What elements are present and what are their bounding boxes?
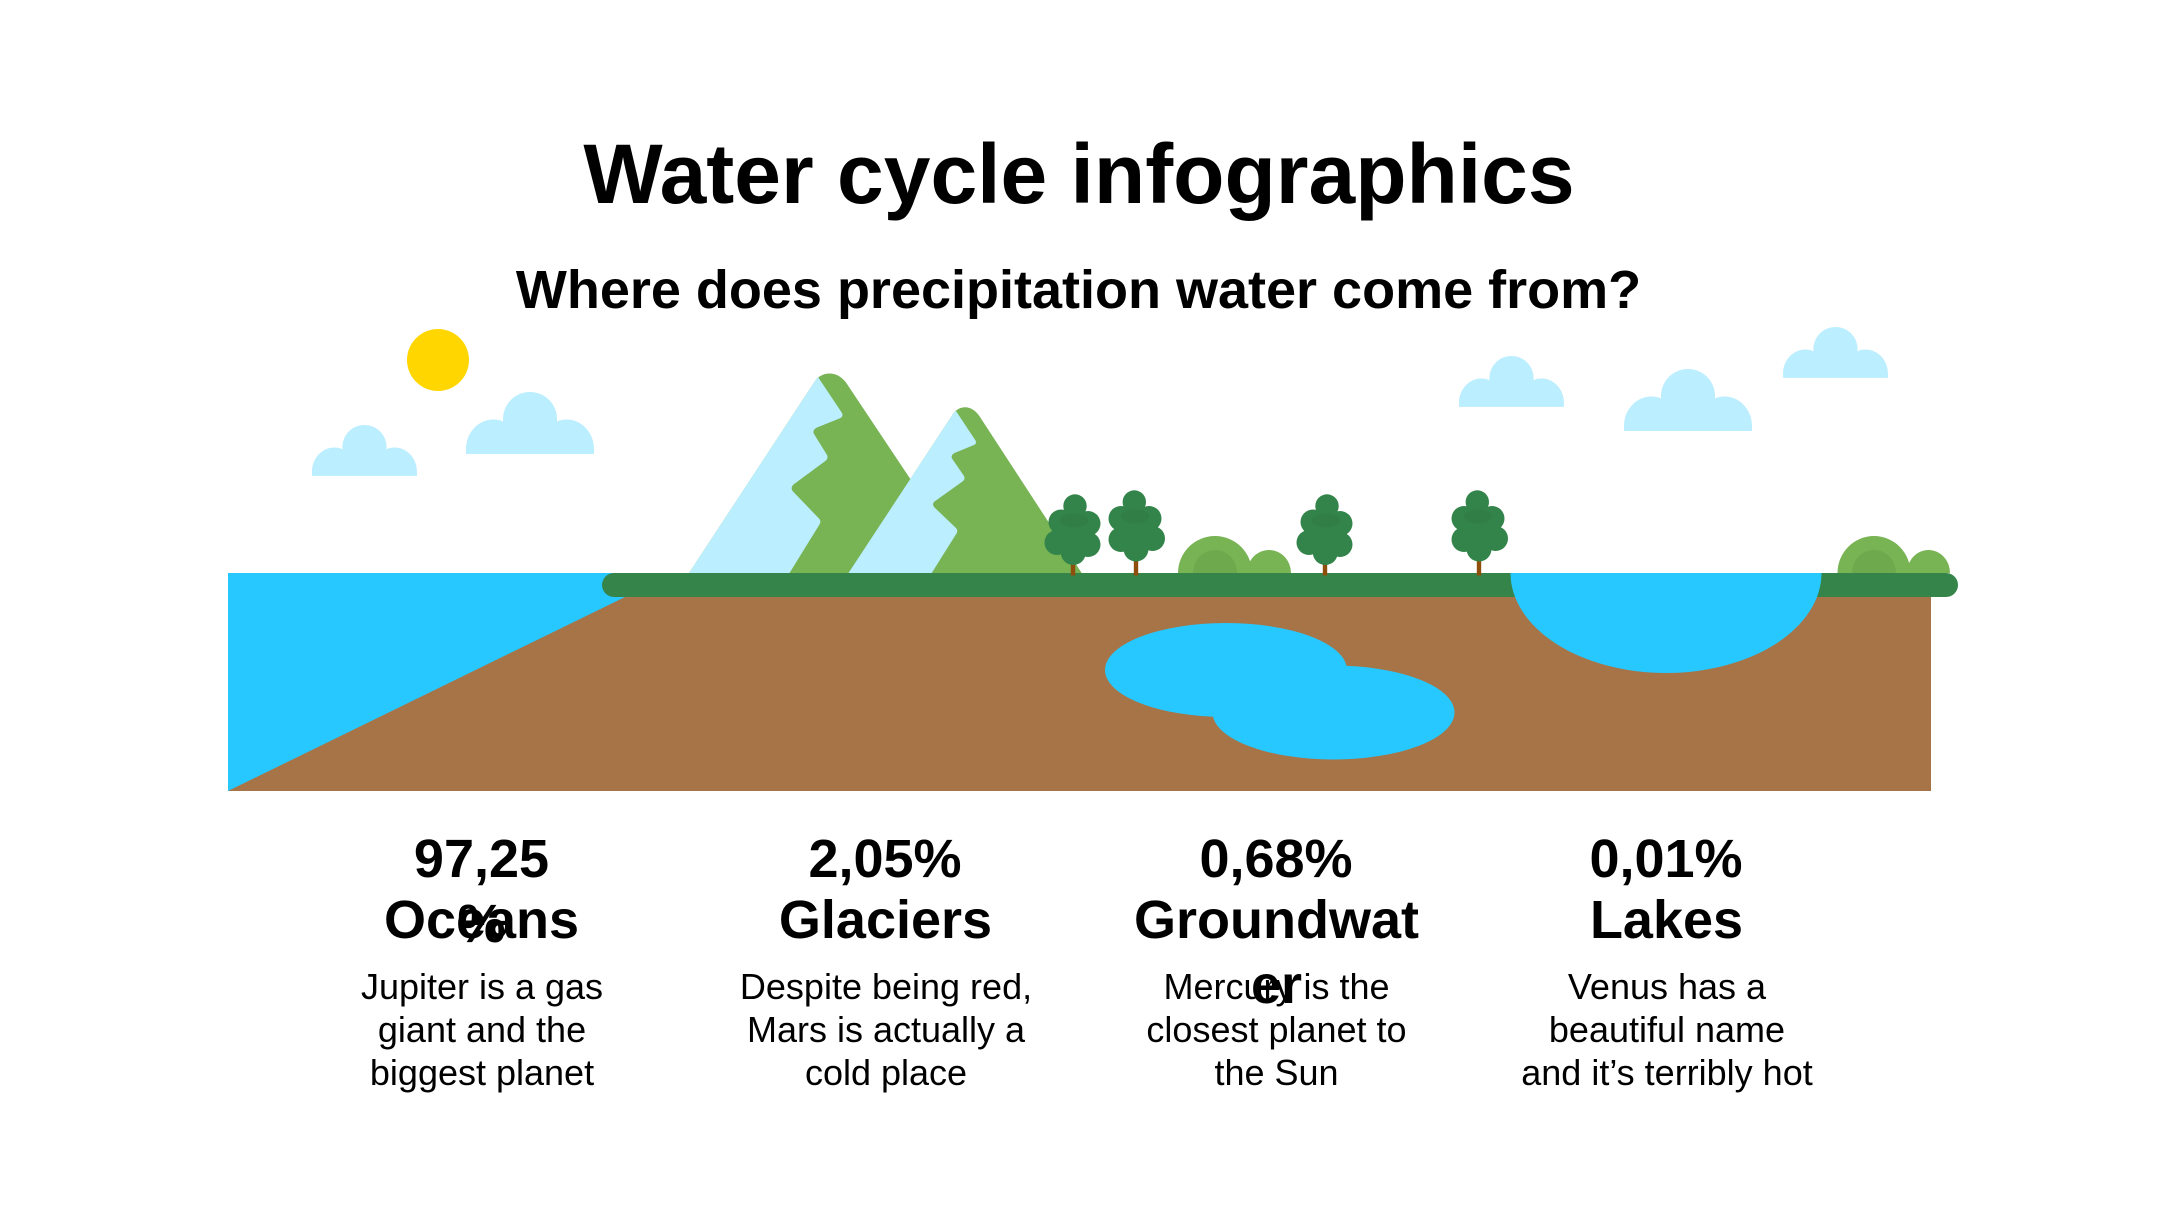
stat: lakes: and it’s terribly hot <box>1521 1052 1813 1093</box>
stat: oceans <box>361 829 603 1093</box>
tree 2 <box>1108 490 1165 576</box>
stat: oceans: % <box>457 894 506 954</box>
tree 4 <box>1452 490 1508 576</box>
stat: glaciers: Despite being red, <box>740 966 1032 1007</box>
cloud 4 <box>1624 369 1752 431</box>
cloud 3 <box>1459 356 1564 407</box>
stat: groundwater: Groundwat <box>1134 890 1419 950</box>
ground <box>228 597 1931 791</box>
stat: glaciers <box>740 829 1032 1093</box>
subtitle: Where does precipitation water come from? <box>516 260 1641 320</box>
stat: lakes: Lakes <box>1590 890 1743 950</box>
stat: glaciers: Glaciers <box>779 890 992 950</box>
tree 3 <box>1296 494 1352 576</box>
cloud 5 <box>1783 327 1888 378</box>
stat: groundwater: er <box>1251 955 1302 1015</box>
tree 1 <box>1044 494 1100 576</box>
stat: oceans: Jupiter is a gas <box>361 966 603 1007</box>
stat: lakes: 0,01% <box>1589 829 1743 889</box>
cloud 2 <box>466 392 594 454</box>
stat: lakes: beautiful name <box>1549 1009 1785 1050</box>
stat: glaciers: Mars is actually a <box>747 1009 1026 1050</box>
stat: glaciers: 2,05% <box>808 829 962 889</box>
groundwater <box>1105 623 1454 760</box>
ocean <box>228 573 648 791</box>
stat: oceans: biggest planet <box>370 1052 594 1093</box>
clouds <box>312 327 1888 476</box>
grass strip <box>602 573 1958 597</box>
bushes right <box>1838 536 1950 573</box>
stat: lakes: Venus has a <box>1568 966 1767 1007</box>
stat: groundwater: the Sun <box>1214 1052 1339 1093</box>
cloud 1 <box>312 425 417 476</box>
stat: oceans: 97,25 <box>414 829 549 889</box>
title: Water cycle infographics <box>583 127 1575 221</box>
stat: glaciers: cold place <box>805 1052 967 1093</box>
stat: oceans: Oceans <box>384 890 579 950</box>
bushes left <box>1178 536 1291 573</box>
stat: groundwater <box>1134 829 1419 1093</box>
lake <box>1510 573 1822 673</box>
icon: sun <box>407 329 469 391</box>
mountain left <box>689 373 973 573</box>
stat: groundwater: 0,68% <box>1199 829 1353 889</box>
stat: groundwater: Mercury is the <box>1163 966 1390 1007</box>
stat: groundwater: closest planet to <box>1146 1009 1407 1050</box>
stat: lakes <box>1521 829 1813 1093</box>
stat: oceans: giant and the <box>378 1009 586 1050</box>
mountain right <box>848 407 1082 573</box>
